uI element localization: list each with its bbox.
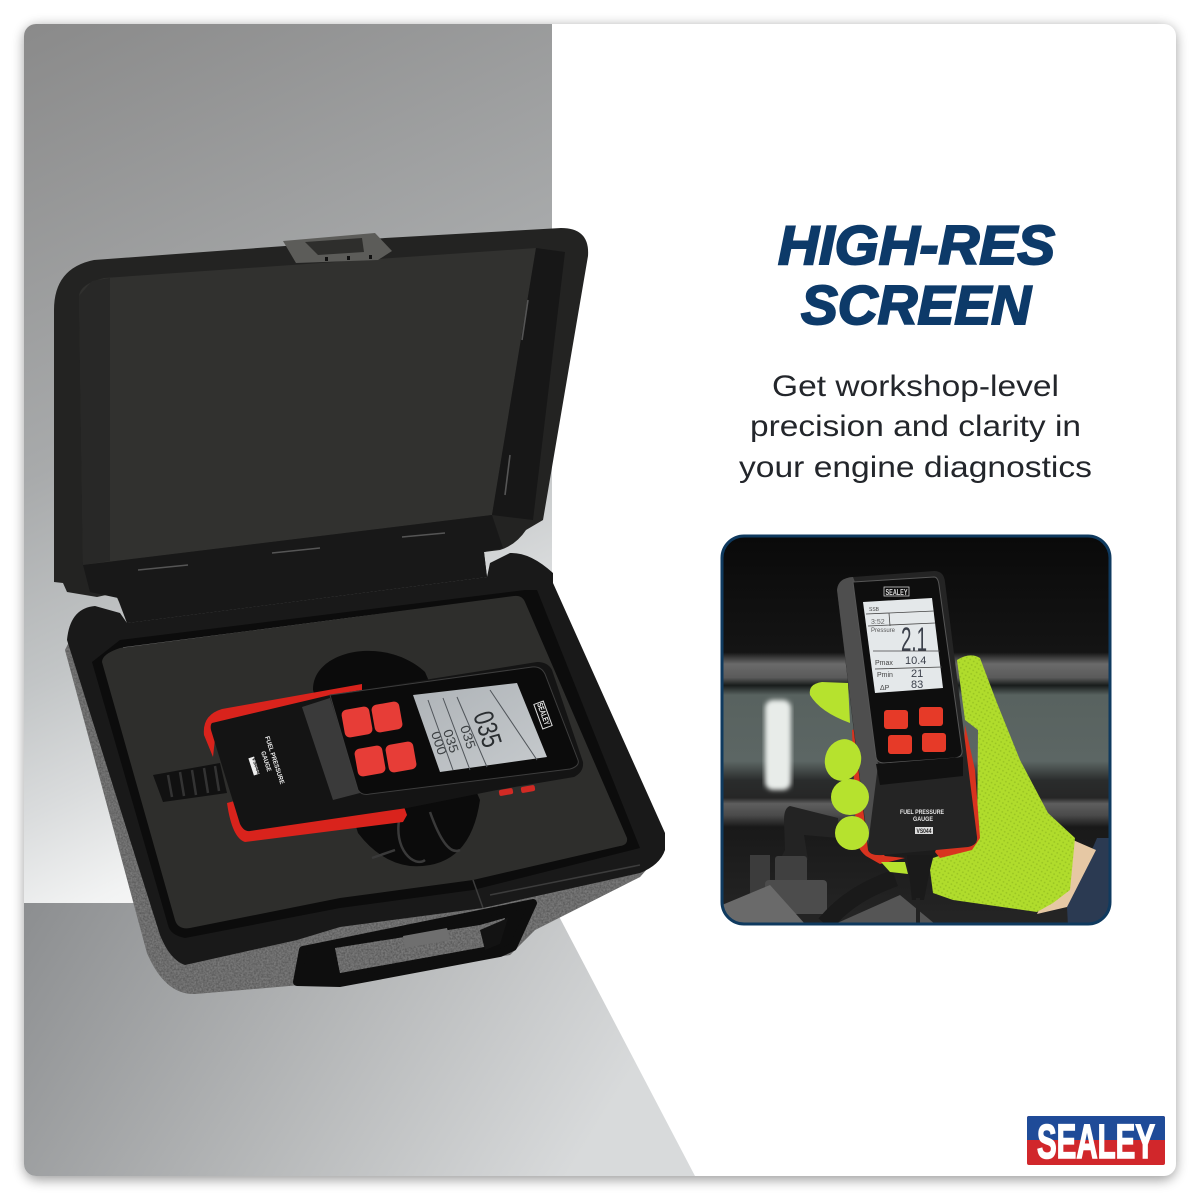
- photo: gauge in gloved hand: [722, 536, 1112, 926]
- engine parts: [722, 806, 935, 924]
- body text: precision and clarity in: [750, 410, 1081, 443]
- foam insert: [102, 596, 627, 928]
- device body: [837, 571, 977, 855]
- LCD screen: 83: [911, 679, 923, 691]
- gauge LCD screen: [413, 683, 547, 772]
- buttons: [884, 707, 946, 754]
- foam cutout: [313, 651, 480, 866]
- gauge LCD screen: 000: [428, 729, 450, 757]
- gauge product text: GAUGE: [259, 750, 272, 773]
- body text: your engine diagnostics: [739, 451, 1092, 484]
- gauge cable: [153, 763, 227, 802]
- body text: [739, 370, 1092, 484]
- carry case with gauge: [54, 228, 665, 994]
- SEALEY label: [884, 587, 909, 597]
- photo frame: [722, 536, 1110, 924]
- gauge buttons: [341, 701, 417, 777]
- case handle: [297, 903, 533, 983]
- gauge in hand: [837, 571, 980, 925]
- LCD screen: 10.4: [905, 655, 926, 667]
- lid latch: [283, 233, 392, 263]
- gauge product text: [248, 735, 285, 786]
- LCD screen: 21: [911, 668, 923, 680]
- heading: HIGH-RES: [778, 214, 1055, 276]
- gauge SEALEY label: SEALEY: [535, 702, 552, 727]
- grey background panels: [24, 24, 695, 1176]
- case base: [65, 553, 665, 994]
- SEALEY label: SEALEY: [886, 588, 908, 597]
- gauge product text: VS044: [250, 757, 261, 775]
- gauge LCD screen: 035: [457, 723, 479, 751]
- gauge product text: FUEL PRESSURE: [263, 735, 285, 786]
- LCD screen: SSB: [869, 607, 880, 613]
- heading: SCREEN: [801, 274, 1032, 336]
- LCD screen: ΔP: [880, 685, 890, 692]
- sleeve and wrist: [1037, 838, 1112, 926]
- LCD screen: Pmax: [875, 660, 893, 667]
- gauge in case: [153, 662, 583, 842]
- red bumper: [852, 729, 905, 864]
- LCD screen: [863, 598, 943, 693]
- LCD screen: Pressure: [871, 628, 896, 634]
- body text: Get workshop-level: [772, 370, 1059, 403]
- product text: [900, 809, 945, 835]
- gauge LCD screen: 035: [467, 707, 508, 751]
- gauge red bumper: [204, 684, 362, 757]
- heading: [778, 214, 1055, 336]
- product text: GAUGE: [913, 816, 934, 823]
- LCD screen: 2.1: [901, 621, 927, 659]
- cable: [930, 866, 931, 870]
- product text: VS044: [916, 828, 932, 835]
- side buttons: [499, 785, 535, 796]
- gauge body: [211, 662, 583, 831]
- glove fingers: [810, 682, 908, 874]
- LCD screen: Pmin: [877, 672, 893, 679]
- product text: FUEL PRESSURE: [900, 809, 945, 816]
- case lid: [54, 228, 588, 623]
- LCD screen: 3:52: [871, 619, 885, 626]
- gauge SEALEY label: [534, 701, 552, 729]
- glove palm: [930, 655, 1075, 912]
- gauge LCD screen: 035: [440, 727, 462, 755]
